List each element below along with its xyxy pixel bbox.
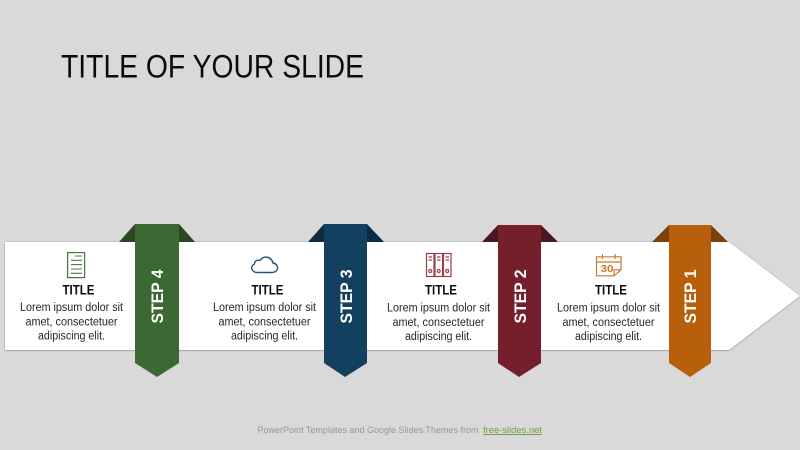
step 1 ribbon bbox=[652, 225, 728, 377]
icon: calendar bbox=[596, 254, 621, 276]
step 4 ribbon: STEP 4 bbox=[148, 269, 167, 324]
step 1 ribbon: STEP 1 bbox=[681, 270, 700, 324]
icon: document bbox=[68, 253, 85, 278]
arrow banner bbox=[5, 242, 800, 350]
step 2 ribbon: STEP 2 bbox=[511, 270, 530, 324]
text block 4: amet, consectetuer bbox=[562, 317, 655, 329]
icon: binders bbox=[426, 254, 451, 276]
text block 2: amet, consectetuer bbox=[218, 316, 311, 328]
text block 3: TITLE bbox=[425, 282, 457, 298]
step 3 ribbon bbox=[308, 224, 384, 377]
text block 4: Lorem ipsum dolor sit bbox=[557, 302, 661, 314]
text block 1: amet, consectetuer bbox=[26, 316, 118, 328]
text block 2 bbox=[213, 282, 317, 342]
step 4 ribbon bbox=[119, 224, 195, 377]
text block 1 bbox=[20, 282, 124, 342]
icon: calendar: 30 bbox=[600, 263, 614, 275]
text block 3 bbox=[387, 282, 491, 343]
text block 4: TITLE bbox=[595, 282, 627, 298]
text block 2: Lorem ipsum dolor sit bbox=[213, 302, 317, 314]
text block 3: Lorem ipsum dolor sit bbox=[387, 302, 491, 314]
title: TITLE OF YOUR SLIDE bbox=[61, 48, 364, 84]
footer: free-slides.net bbox=[483, 425, 542, 436]
text block 2: TITLE bbox=[252, 282, 284, 298]
text block 1: Lorem ipsum dolor sit bbox=[20, 302, 124, 314]
text block 3: amet, consectetuer bbox=[392, 317, 485, 329]
icon: cloud bbox=[252, 257, 278, 272]
text block 4: adipiscing elit. bbox=[575, 331, 642, 343]
step 3 ribbon: STEP 3 bbox=[337, 270, 356, 324]
text block 1: TITLE bbox=[62, 282, 94, 298]
text block 3: adipiscing elit. bbox=[405, 331, 472, 343]
footer: PowerPoint Templates and Google Slides Themes from bbox=[258, 425, 479, 436]
text block 4 bbox=[557, 282, 661, 343]
step 2 ribbon bbox=[482, 225, 558, 377]
text block 1: adipiscing elit. bbox=[38, 330, 105, 342]
text block 2: adipiscing elit. bbox=[231, 330, 298, 342]
